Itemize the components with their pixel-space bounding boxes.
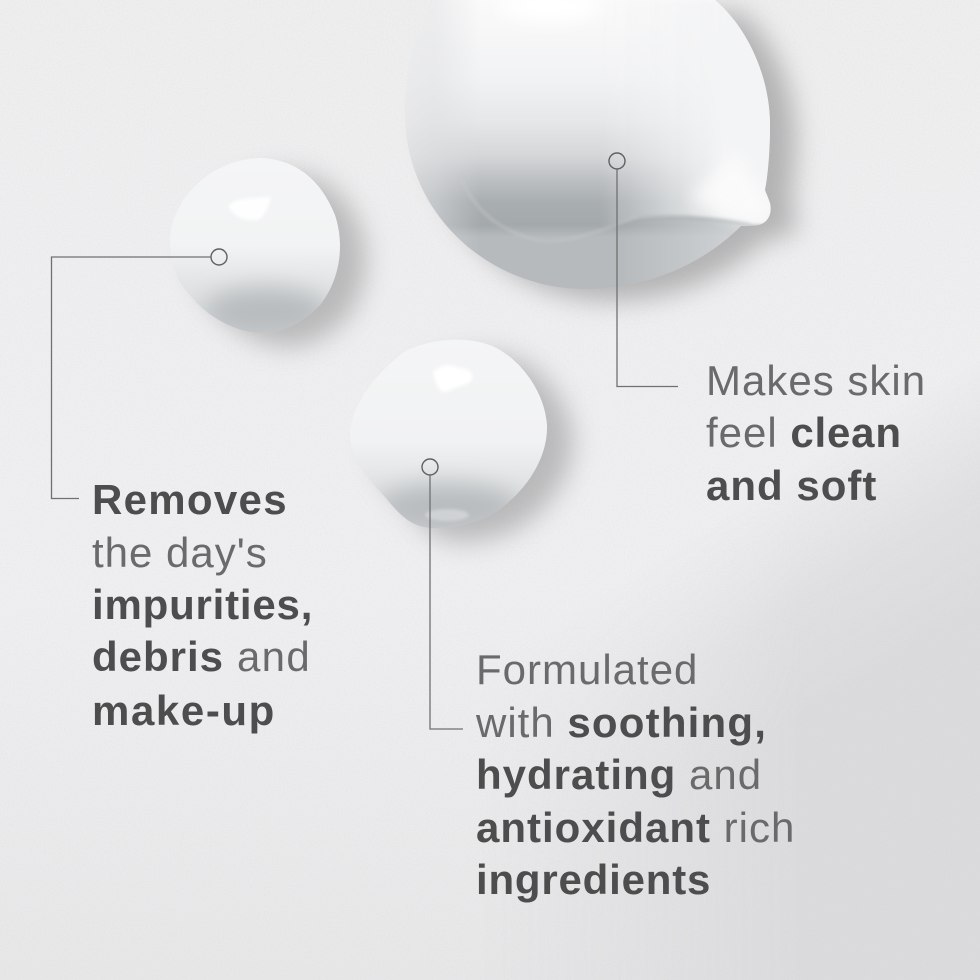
text: removes impurities: impurities, [92,581,313,628]
text: removes impurities: debris [92,633,224,680]
leader line: clean and soft [609,153,678,386]
callout: removes impurities [52,249,326,734]
text: formulated: rich [711,804,795,851]
text: formulated: soothing, [567,699,767,746]
text: formulated: and [676,751,762,798]
text: clean and soft: clean [790,409,902,456]
text: formulated: Formulated [476,646,698,693]
text: formulated: antioxidant [476,804,711,851]
blob: large cream swatch [400,0,797,301]
leader line: formulated [422,459,463,729]
text: formulated: ingredients [476,856,711,903]
text: removes impurities: make-up [92,687,276,734]
callout: clean and soft [609,153,939,509]
blob: small left swatch [165,155,366,347]
text: removes impurities: Removes [92,476,288,523]
callout: formulated with ingredients [422,459,808,903]
text: formulated: with [475,699,567,746]
text: removes impurities: the day's [92,529,268,576]
text: clean and soft: feel [706,409,790,456]
text: clean and soft: and soft [706,462,877,509]
text: formulated: hydrating [476,751,676,798]
background surface [0,394,980,980]
text: clean and soft: Makes skin [706,357,926,404]
leader line: removes impurities [52,249,227,498]
text: removes impurities: and [224,633,311,680]
blob: middle swatch [345,330,573,542]
